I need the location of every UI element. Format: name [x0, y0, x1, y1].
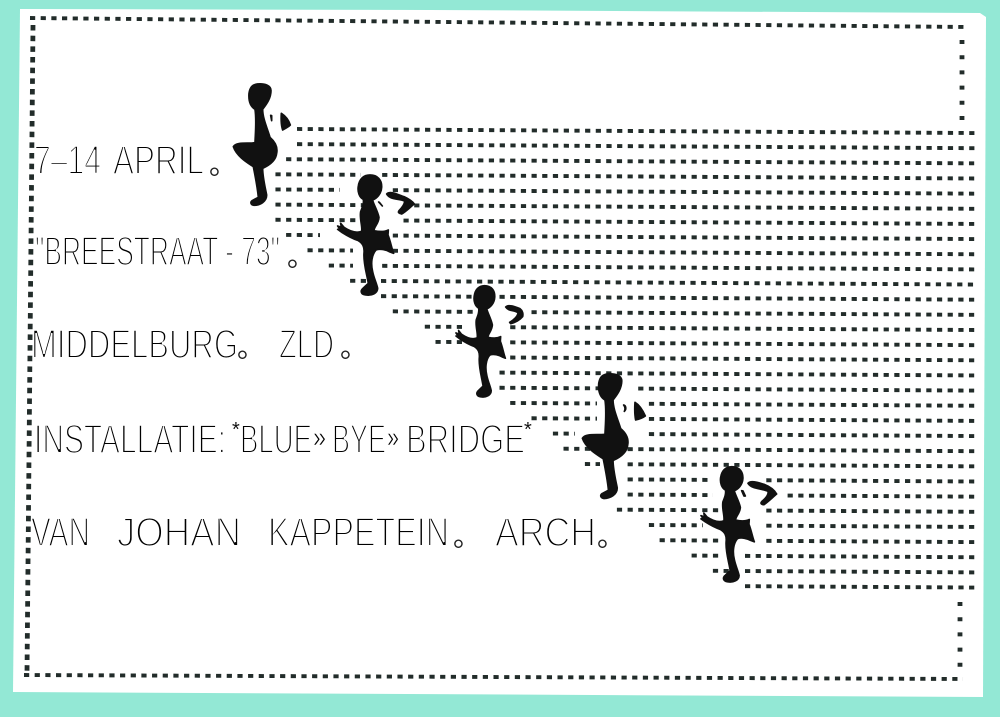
text: artist: ARCH	[495, 509, 596, 555]
figure 3: dancer silhouette with boomerang	[456, 286, 523, 397]
figure 2: dancer silhouette with boomerang	[338, 175, 414, 295]
dotted staircase field	[275, 129, 975, 588]
figure 4 triangle	[624, 402, 645, 420]
text: artist: JOHAN	[117, 509, 241, 555]
text: artist	[31, 509, 625, 555]
text: installation title: BLUE	[240, 416, 312, 462]
text: address: 。	[287, 241, 315, 272]
text: city: ZLD	[279, 321, 334, 367]
figure 4 body	[582, 374, 628, 498]
text: artist: 。	[453, 521, 481, 552]
text: dates: APRIL	[113, 137, 204, 183]
figure 5: dancer silhouette with boomerang	[701, 467, 777, 582]
text: artist: KAPPETEIN	[268, 509, 449, 555]
figure 3 body	[456, 286, 505, 397]
text: dates: 。	[209, 149, 237, 180]
figure 3 boomerang	[506, 306, 523, 324]
text: installation title: *	[232, 419, 240, 441]
text: installation title: INSTALLATIE:	[34, 416, 226, 462]
text: installation title: »	[387, 421, 399, 454]
text: artist: VAN	[31, 509, 90, 555]
figure 5 body	[701, 467, 754, 582]
text: installation title: BYE	[332, 416, 386, 462]
text: installation title: »	[313, 421, 326, 454]
figure 4: dancer silhouette with triangle	[582, 374, 645, 498]
figure 1: dancer silhouette with triangle	[233, 84, 290, 205]
text: city: MIDDELBURG	[31, 321, 238, 367]
text: artist: 。	[597, 521, 625, 552]
text: dates: 7–14	[34, 137, 101, 183]
text block: event details	[31, 137, 625, 555]
text: installation title	[34, 416, 532, 462]
text: installation title: BRIDGE	[406, 416, 525, 462]
figure 5 boomerang	[742, 482, 777, 505]
text: dates	[34, 137, 237, 183]
text: address: "BREESTRAAT - 73"	[35, 228, 280, 274]
text: city: 。	[340, 332, 368, 363]
text: installation title: *	[524, 419, 532, 441]
text: city: 。	[237, 332, 265, 363]
